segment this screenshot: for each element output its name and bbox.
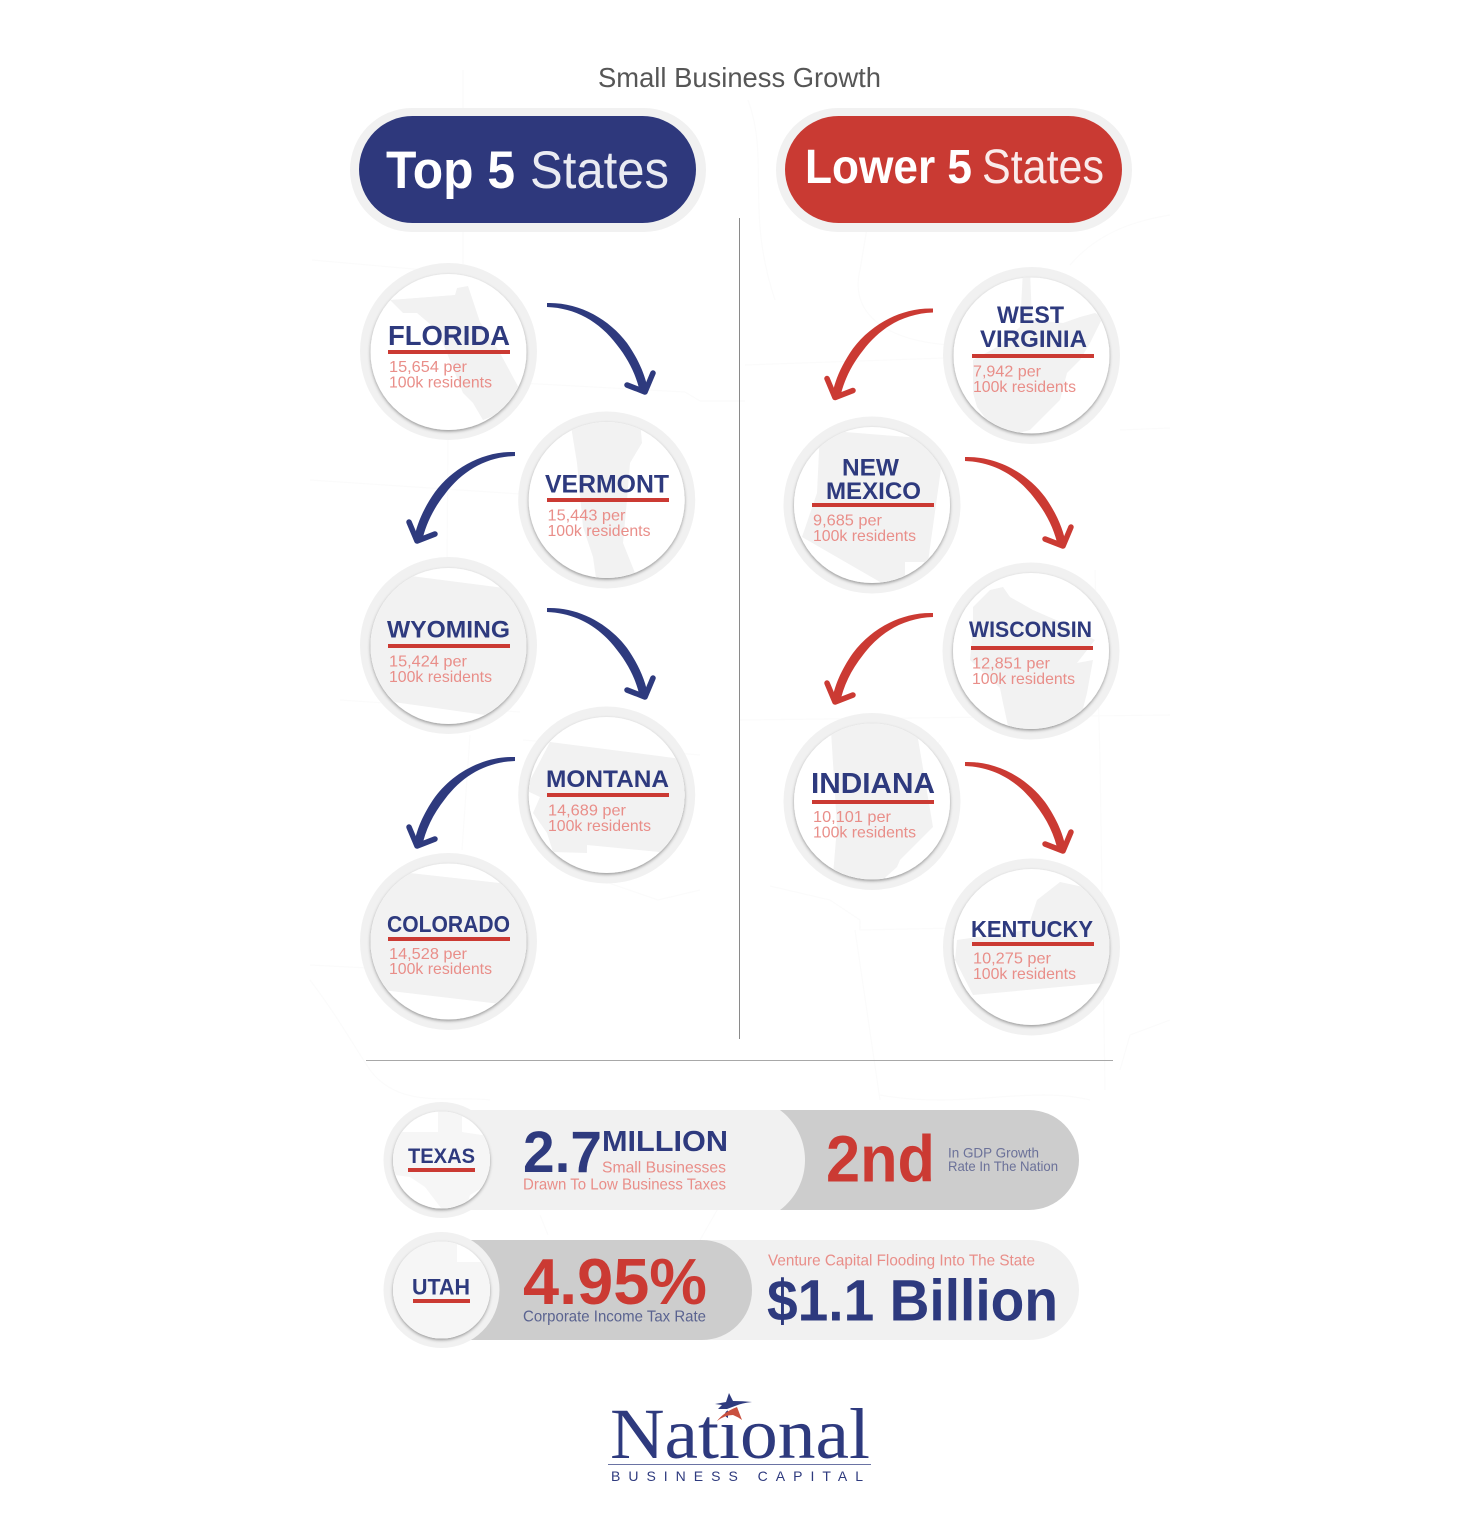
logo: National Business Capital: National [610, 1394, 870, 1474]
banner: top 5 states: States [530, 141, 669, 200]
state: Wyoming [360, 557, 537, 734]
banner: top 5 states: Top 5 [386, 141, 515, 200]
panel: Utah stats: Venture Capital Flooding Into The State [768, 1252, 1035, 1270]
state: Wisconsin [942, 562, 1120, 740]
state: Vermont: VERMONT [545, 470, 669, 498]
panel: Utah stats: UTAH [412, 1274, 470, 1300]
state: Colorado: COLORADO [387, 911, 510, 937]
state: New Mexico: MEXICO [826, 478, 921, 505]
state: Wyoming: 15,424 per [389, 654, 468, 670]
state: Florida: 100k residents [389, 374, 492, 392]
state: Kentucky: 100k residents [973, 966, 1076, 983]
panel: Texas stats: 2nd [826, 1122, 935, 1196]
logo: National Business Capital: BUSINESS CAPITAL [611, 1468, 863, 1484]
panel: Texas stats: TEXAS [408, 1145, 475, 1168]
arrow: Florida to Vermont [547, 303, 653, 393]
panel: Utah stats: Corporate Income Tax Rate [523, 1308, 706, 1326]
arrow: Wisconsin to Indiana [827, 613, 933, 703]
arrow: New Mexico to Wisconsin [965, 457, 1071, 547]
arrow: Montana to Colorado [409, 757, 515, 847]
state: Indiana: INDIANA [811, 768, 935, 800]
state: West Virginia: 100k residents [973, 379, 1076, 396]
center vertical divider [739, 218, 740, 1039]
banner: lower 5 states: Lower 5 [805, 141, 972, 194]
panel: Texas stats [384, 1102, 1079, 1218]
panel: Texas stats: In GDP Growth [948, 1144, 1039, 1160]
state: New Mexico: 9,685 per [813, 512, 883, 530]
state: Indiana [784, 713, 960, 890]
state: Kentucky: 10,275 per [973, 950, 1052, 968]
state: Indiana: 10,101 per [813, 809, 892, 826]
state: Indiana: 100k residents [813, 824, 916, 842]
state: New Mexico: 100k residents [813, 528, 916, 545]
banner: lower 5 states [776, 108, 1132, 232]
title: Small Business Growth [598, 62, 881, 93]
state: Colorado [360, 853, 537, 1030]
panel: Utah stats: 4.95% [523, 1245, 707, 1318]
state: West Virginia: VIRGINIA [980, 326, 1087, 353]
state: Colorado: 100k residents [389, 961, 492, 978]
state: West Virginia: 7,942 per [973, 364, 1042, 380]
state: Colorado: 14,528 per [389, 946, 468, 963]
banner: top 5 states [350, 108, 706, 232]
panel: Texas stats: Drawn To Low Business Taxes [523, 1176, 726, 1194]
panel: Utah stats: $1.1 Billion [767, 1268, 1058, 1334]
state: Montana: 14,689 per [548, 802, 627, 820]
panel: Utah stats [384, 1232, 1079, 1348]
arrow: Indiana to Kentucky [965, 762, 1071, 852]
state: Kentucky [943, 858, 1120, 1036]
state: Wyoming: 100k residents [389, 669, 492, 686]
arrow: Vermont to Wyoming [409, 452, 515, 542]
state: Florida [360, 263, 537, 440]
state: Wisconsin: 100k residents [972, 671, 1075, 688]
banner: lower 5 states: States [982, 141, 1104, 194]
state: Florida: 15,654 per [389, 359, 468, 376]
state: New Mexico [784, 416, 960, 594]
state: Montana [518, 706, 695, 884]
state: Montana: MONTANA [546, 766, 669, 793]
horizontal divider [366, 1060, 1113, 1061]
panel: Texas stats: 2.7 [523, 1120, 602, 1185]
state: Wyoming: WYOMING [387, 616, 510, 644]
state: New Mexico: NEW [842, 454, 899, 482]
state: Vermont [518, 412, 695, 588]
state: West Virginia [943, 267, 1120, 444]
state: Florida: FLORIDA [388, 320, 510, 351]
arrow: West Virginia to New Mexico [827, 308, 933, 398]
state: Wisconsin: WISCONSIN [969, 617, 1092, 642]
panel: Texas stats: Small Businesses [602, 1160, 726, 1176]
state: Vermont: 15,443 per [548, 508, 626, 524]
arrow: Wyoming to Montana [547, 608, 653, 698]
state: Montana: 100k residents [548, 818, 651, 835]
panel: Texas stats: MILLION [602, 1126, 728, 1158]
state: West Virginia: WEST [997, 302, 1064, 329]
state: Vermont: 100k residents [548, 523, 650, 540]
state: Wisconsin: 12,851 per [972, 656, 1051, 672]
panel: Texas stats: Rate In The Nation [948, 1158, 1058, 1174]
state: Kentucky: KENTUCKY [971, 916, 1093, 942]
